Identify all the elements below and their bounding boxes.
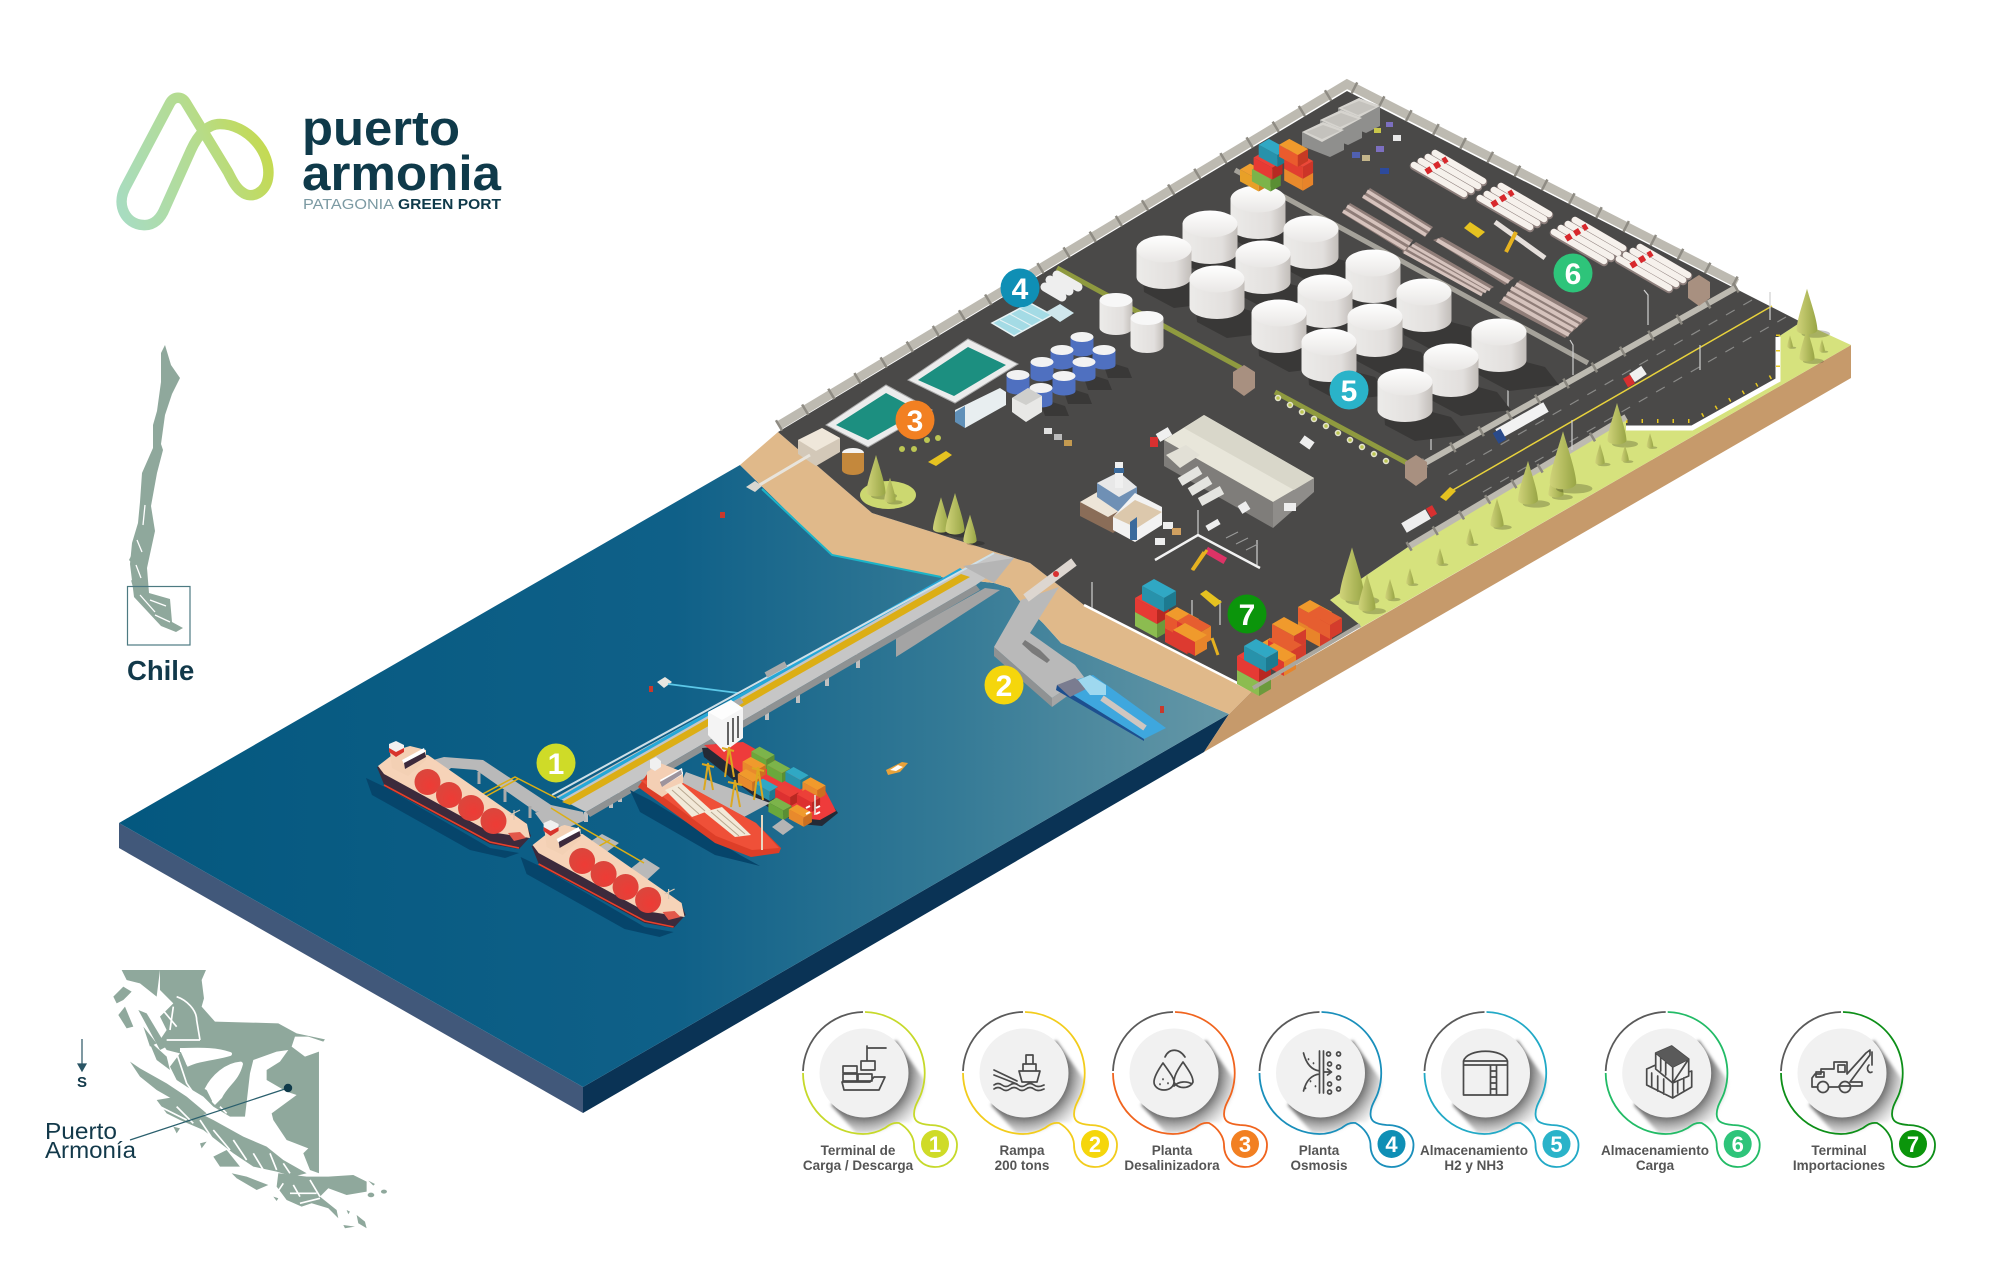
small boat — [886, 762, 908, 775]
legend item 3: Planta — [1152, 1143, 1193, 1158]
zone 5: hydrogen tanks — [1136, 186, 1559, 441]
legend item 1: Terminal de — [821, 1143, 896, 1158]
marker 4: 4 — [1012, 273, 1029, 306]
zone 4: greenhouse panels — [992, 303, 1074, 336]
marker 5: 5 — [1341, 375, 1357, 408]
LNG tanker lower — [521, 820, 686, 937]
zone 2: roll-on ramp — [994, 562, 1084, 707]
Puerto Armonía label: Puerto — [45, 1118, 117, 1144]
legend item 2 — [963, 1012, 1117, 1173]
legend item 6: 6 — [1732, 1132, 1744, 1157]
asphalt yard — [778, 91, 1801, 690]
legend item 4: 4 — [1385, 1132, 1398, 1157]
legend item 7: Terminal — [1811, 1143, 1867, 1158]
road markings — [1448, 300, 1786, 496]
bushes near zone 3 — [899, 435, 941, 452]
logo: puerto armonia: armonia — [302, 147, 502, 201]
marker 1: 1 — [548, 748, 564, 781]
marker 5 — [1330, 370, 1368, 410]
Chile silhouette — [129, 345, 183, 632]
perimeter walls — [778, 84, 1737, 547]
zone 4: small white vessels — [1045, 275, 1078, 297]
logo wordmark: puerto — [302, 102, 460, 156]
legend item 3: Desalinizadora — [1124, 1158, 1220, 1173]
zone 7: right container stack — [1237, 600, 1360, 696]
legend item 2: 200 tons — [995, 1158, 1049, 1173]
marker 1 — [536, 744, 576, 782]
green landscape strip — [1330, 322, 1851, 628]
warehouse — [1164, 415, 1314, 528]
marker 7 — [1228, 594, 1266, 634]
sea front face — [583, 714, 1229, 1113]
marker 2: 2 — [996, 670, 1012, 703]
legend item 3 — [1113, 1012, 1267, 1173]
shore trees — [933, 493, 985, 546]
Chile label: Chile — [127, 655, 194, 686]
LNG tanker upper — [366, 741, 531, 858]
mid-sea platform — [657, 677, 738, 693]
Patagonia silhouette — [113, 970, 387, 1228]
marker 7: 7 — [1239, 599, 1255, 632]
zone 6: storage buildings at north corner — [1302, 98, 1380, 157]
guard gates — [1233, 275, 1710, 486]
map: Patagonia region: Armonía — [45, 1137, 136, 1163]
legend item 5: Almacenamiento — [1420, 1143, 1528, 1158]
map: Chile — [127, 345, 194, 686]
intake pipe and pier — [746, 455, 810, 492]
container ship — [702, 700, 838, 827]
main jetty supports — [586, 588, 1000, 822]
map: Patagonia region — [45, 970, 387, 1228]
marker 3: 3 — [907, 405, 923, 438]
zone 6: wind blade bundles — [1414, 153, 1688, 289]
logo: puerto armonia: GREEN PORT — [398, 197, 501, 213]
zone 3: hazard pad and white truck — [928, 388, 1006, 466]
guard box — [1012, 388, 1072, 446]
zone 7: forklifts — [1192, 552, 1218, 655]
logo loop mark — [122, 98, 268, 225]
green strip trees — [1340, 289, 1830, 614]
legend item 7 — [1781, 1012, 1935, 1173]
sea surface — [119, 465, 1229, 1087]
road vehicles — [1404, 370, 1644, 528]
sea side face — [119, 823, 583, 1113]
warehouse trucks — [1150, 431, 1312, 511]
zone 3: desalination pools — [826, 339, 1018, 447]
hedge dots — [1276, 396, 1388, 464]
small boat detail — [890, 765, 903, 771]
legend item 5 — [1420, 1012, 1578, 1173]
legend item 2: Rampa — [999, 1143, 1045, 1158]
zone 6: tower pipe bundles — [1342, 188, 1588, 338]
legend item 7: 7 — [1907, 1132, 1919, 1157]
legend item 4 — [1260, 1012, 1414, 1173]
zone markers — [536, 254, 1592, 782]
logo tagline: PATAGONIA — [303, 197, 394, 213]
legend item 3: 3 — [1239, 1132, 1251, 1157]
legend item 6 — [1601, 1012, 1760, 1173]
legend item 2: 2 — [1089, 1132, 1101, 1157]
legend item 4: Planta — [1299, 1143, 1340, 1158]
zone 3: desalination building — [798, 428, 864, 475]
legend item 1: Carga / Descarga — [803, 1158, 914, 1173]
legend item 7: Importaciones — [1793, 1158, 1885, 1173]
dock cranes — [702, 747, 764, 807]
zone 7: left container stack — [1135, 579, 1211, 656]
zone 4: silver silos — [1100, 293, 1164, 353]
legend — [803, 1012, 1935, 1173]
zone 6: parked cars — [1352, 122, 1401, 174]
loading arms to LNG ships — [426, 757, 660, 888]
south arrow — [78, 1039, 86, 1071]
legend item 6: Carga — [1636, 1158, 1675, 1173]
zone 4: blue barrels — [1006, 332, 1132, 416]
legend item 5: H2 y NH3 — [1444, 1158, 1504, 1173]
cyan sea wall — [762, 489, 941, 577]
logo: puerto armonia — [122, 98, 502, 225]
legend item 1 — [803, 1012, 957, 1173]
zone 6: crane with blade — [1495, 222, 1545, 258]
blade carrier ship — [630, 757, 781, 866]
legend item 1: 1 — [929, 1132, 941, 1157]
marker 6: 6 — [1565, 258, 1581, 291]
map: Patagonia region: S — [77, 1074, 87, 1091]
pad near crane platform — [772, 819, 794, 835]
sand shore — [740, 432, 1253, 714]
crane platform — [680, 772, 770, 817]
legend item 6: Almacenamiento — [1601, 1143, 1709, 1158]
main jetty deck — [552, 553, 1014, 817]
jetty vehicles — [722, 664, 786, 715]
marker 6 — [1554, 254, 1592, 292]
marker 2 — [984, 666, 1024, 704]
north containers — [1240, 139, 1313, 192]
location pointer — [130, 1088, 288, 1140]
marker 3 — [896, 400, 934, 440]
zone 2: barge — [1056, 675, 1166, 741]
headquarters building — [1080, 462, 1181, 545]
zone 3: tree island — [860, 455, 916, 509]
legend item 4: Osmosis — [1290, 1158, 1348, 1173]
isometric port scene — [119, 84, 1851, 1113]
hazard pads — [1200, 222, 1485, 607]
white edge fence — [1626, 337, 1778, 428]
parking area lines — [1155, 519, 1260, 570]
red buoys — [649, 512, 1164, 713]
legend item 5: 5 — [1550, 1132, 1563, 1157]
land front face — [1204, 345, 1851, 752]
inset box — [128, 586, 190, 645]
yard lamp posts — [1092, 290, 1770, 630]
marker 4 — [1000, 268, 1040, 308]
